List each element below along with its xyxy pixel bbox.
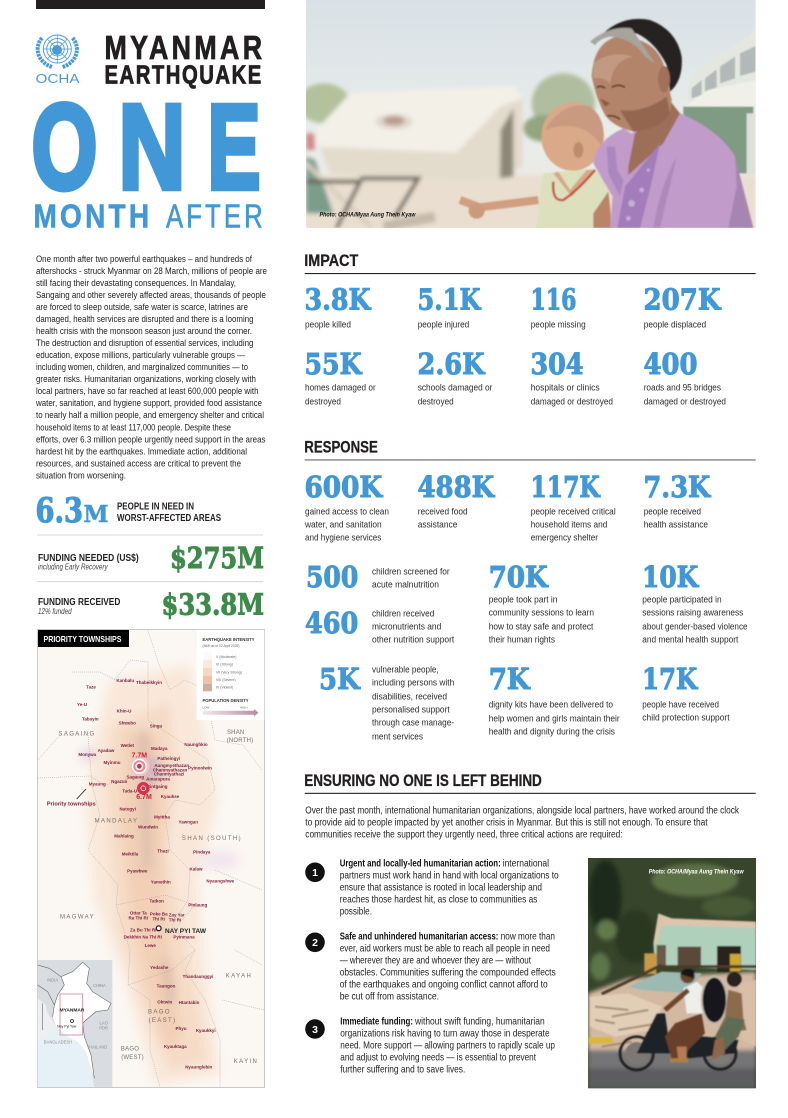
title: Myanmar Earthquake <box>104 30 262 89</box>
stat: food assistance <box>418 470 495 531</box>
map: priority townships <box>38 630 264 1088</box>
action 2: now more than <box>501 932 555 943</box>
map inset: Myanmar locator <box>38 960 112 1088</box>
map region labels: (EAST) <box>148 1018 177 1024</box>
map township labels: Thabeikkyin <box>136 680 162 685</box>
intro text block: situation from worsening. <box>36 470 126 481</box>
map township labels: Aungmyethazan <box>154 763 189 768</box>
icon: number 3 <box>305 1019 325 1039</box>
stat: child protection: people have received <box>642 700 719 711</box>
response stats <box>304 470 748 743</box>
map township labels: Patheingyi <box>157 756 180 761</box>
action 3 <box>305 1017 555 1076</box>
action 1: partners must work hand in hand with local organizations to <box>340 871 559 882</box>
map township labels: Thi Ri <box>169 918 181 923</box>
map legend <box>197 630 264 720</box>
map region labels: BAGO <box>121 1046 139 1052</box>
action 2: Safe and unhindered humanitarian access: <box>340 932 498 943</box>
map township labels: Ottar Ta <box>130 911 147 916</box>
stat: people in need: WORST-AFFECTED AREAS <box>117 513 221 524</box>
stat: vulnerable people <box>319 662 454 743</box>
map township labels: Shwebo <box>119 721 136 726</box>
action 2: of the earthquakes and ongoing conflict cannot afford to <box>340 980 548 991</box>
stat: roads and bridges: roads and 95 bridges <box>644 383 721 394</box>
icon: number 3: 3 <box>312 1024 318 1036</box>
map township labels: Pyawbwe <box>127 868 148 873</box>
map township labels: Sintgaing <box>147 784 168 789</box>
stat: child protection: child protection support <box>642 713 730 724</box>
intro text block: hardest hit by the earthquakes. Immediate action, additional <box>36 446 247 457</box>
action 1: possible. <box>340 907 372 918</box>
intro text block: education, expose millions, particularly vulnerable groups — <box>36 350 245 361</box>
stat: gender-based violence sessions: and mental health support <box>642 635 739 646</box>
stat: children screened: children screened for <box>372 567 450 578</box>
map township labels: Kanbalu <box>116 678 134 683</box>
stat: people in need: PEOPLE IN NEED IN <box>117 502 194 513</box>
map township labels: Madaya <box>151 746 168 751</box>
map township labels: Pyinoolwin <box>188 766 212 771</box>
heading: impact: IMPACT <box>304 252 358 270</box>
map legend: VI (Strong) <box>216 663 233 667</box>
map inset: Myanmar locator: LAO <box>100 1021 109 1026</box>
title: Month After <box>34 199 263 236</box>
intro paragraph: ensuring <box>305 806 740 841</box>
stat: roads and bridges: 400 <box>644 347 698 381</box>
intro text block <box>35 254 267 481</box>
stat: clean water: 600K <box>304 470 383 504</box>
intro text block: resources, and sustained access are critical to prevent the <box>36 458 241 469</box>
map township labels: Mahlaing <box>114 834 134 839</box>
heading: ensuring no one is left behind: ENSURING NO ONE IS LEFT BEHIND <box>304 772 542 790</box>
map township labels: Pinlaung <box>188 902 207 907</box>
intro text block: efforts, over 6.3 million people urgently need support in the areas <box>36 434 266 445</box>
stat: funding received: FUNDING RECEIVED <box>38 597 120 608</box>
stat: dignity kits: 7K <box>489 662 531 696</box>
map township labels: Phyu <box>175 1026 187 1031</box>
stat: funding needed: including Early Recovery <box>38 562 109 572</box>
stat: vulnerable people: personalised support <box>372 705 450 716</box>
map heading: priority townships <box>38 630 129 647</box>
map callout: priority townships: Priority townships <box>47 802 96 808</box>
map township labels: Meiktila <box>122 851 139 856</box>
title: Myanmar Earthquake: MYANMAR <box>104 30 262 67</box>
stat: vulnerable people: ment services <box>372 732 423 743</box>
map region labels: KAYAH <box>226 974 252 980</box>
stat: people in need: 6.3 <box>36 491 83 531</box>
action 2: — wherever they are and whoever they are — without <box>340 956 531 967</box>
photo: motorbike passing collapsed building: Photo: OCHA/Myaa Aung Thein Kyaw <box>649 869 744 876</box>
map township labels: Chanmyathazan <box>153 767 188 772</box>
icon: number 2: 2 <box>312 937 318 949</box>
map township labels: Zay Yar <box>169 913 185 918</box>
intro text block: The destruction and disruption of essential services, including <box>36 338 254 349</box>
title: ONE: E <box>208 79 260 215</box>
stat: vulnerable people: vulnerable people, <box>372 665 439 676</box>
map township labels: Tada-U <box>122 788 137 793</box>
intro paragraph: ensuring: communities receive the support they urgently need, three critical actions are required: <box>305 830 623 841</box>
photo: motorbike passing collapsed building <box>588 858 756 1089</box>
stat: vulnerable people: including persons with <box>372 678 454 689</box>
intro text block: including women, children, and marginalized communities — to <box>36 362 248 373</box>
map inset: Myanmar locator: Nay Pyi Taw <box>57 1025 77 1029</box>
stat: funding needed <box>38 541 264 575</box>
stat: household items: people received critical <box>531 507 616 518</box>
top black bar <box>36 0 265 9</box>
map township labels: Yamethin <box>151 880 171 885</box>
stat: schools damaged: 2.6K <box>418 347 486 381</box>
title: ONE: O <box>32 79 97 215</box>
title: ONE: N <box>118 79 186 215</box>
stat: people in need <box>36 491 221 531</box>
title: ONE <box>32 79 261 215</box>
stat: food assistance: received food <box>418 507 468 518</box>
map township labels: Amarapura <box>146 777 170 782</box>
stat: vulnerable people: through case manage- <box>372 718 454 729</box>
stat: household items: 117K <box>530 470 601 504</box>
action 1 <box>305 859 559 918</box>
map legend: POPULATION DENSITY <box>202 698 249 703</box>
stat: schools damaged: schools damaged or <box>418 383 493 394</box>
map township labels: Nyaungshwe <box>206 878 235 883</box>
stat: people injured: people injured <box>418 320 469 331</box>
intro text block: water, sanitation, and hygiene support, provided food assistance <box>35 398 262 409</box>
map township labels: Thi Ri <box>152 916 165 921</box>
map township labels: Taze <box>86 685 96 690</box>
map region labels: SHAN <box>227 730 244 736</box>
stat: people injured: 5.1K <box>418 282 482 316</box>
map township labels: Pyinmana <box>173 934 195 939</box>
map inset: Myanmar locator: MYANMAR <box>60 1008 85 1014</box>
map inset: Myanmar locator: THAILAND <box>87 1045 107 1050</box>
stat: gender-based violence sessions: 10K <box>642 560 699 594</box>
action 3: Immediate funding: <box>340 1017 413 1028</box>
map heading: priority townships: PRIORITY TOWNSHIPS <box>44 635 122 644</box>
map region labels: (WEST) <box>121 1055 144 1061</box>
photo: grandmother and child at displacement site <box>298 0 756 228</box>
stat: homes damaged <box>304 347 376 408</box>
stat: health assistance: 7.3K <box>644 470 711 504</box>
icon: OCHA logo: OCHA <box>36 71 80 86</box>
stat: children screened: 500 <box>306 560 358 594</box>
map region labels: MAGWAY <box>60 914 95 920</box>
stat: food assistance: assistance <box>418 520 457 531</box>
map legend: HIGH <box>240 705 248 709</box>
stat: micronutrients <box>305 606 455 646</box>
stat: child protection <box>642 662 730 724</box>
stat: gender-based violence sessions: sessions raising awareness <box>642 608 743 619</box>
stat: health assistance: health assistance <box>644 520 708 531</box>
action 2: be cut off from assistance. <box>340 992 439 1003</box>
map township labels: Ra Thi Ri <box>129 916 148 921</box>
map legend: IX (Violent) <box>216 686 233 690</box>
action 2: ever, aid workers must be able to reach all people in need <box>340 944 550 955</box>
baby <box>460 103 613 228</box>
stat: community sessions: how to stay safe and protect <box>489 622 594 633</box>
map township labels: Pindaya <box>193 849 211 854</box>
map township labels: Poke Ba <box>150 911 168 916</box>
map legend: EARTHQUAKE INTENSITY <box>202 637 255 642</box>
map callout: priority townships <box>47 789 96 808</box>
stat: clean water: and hygiene services <box>305 533 381 544</box>
photo: grandmother and child at displacement site: Photo: OCHA/Myaa Aung Thein Kyaw <box>320 212 416 218</box>
stat: people injured <box>418 282 482 331</box>
map epicentre: 7.7M <box>129 752 149 776</box>
action 1: international <box>503 859 549 870</box>
stat: children screened: acute malnutrition <box>372 580 439 591</box>
icon: number 1 <box>305 862 325 882</box>
map region labels: (NORTH) <box>227 738 253 744</box>
stat: children screened <box>306 560 450 594</box>
icon: number 2 <box>305 932 325 952</box>
stat: micronutrients: micronutrients and <box>372 622 441 633</box>
stat: dignity kits <box>489 662 620 738</box>
stat: roads and bridges: damaged or destroyed <box>644 397 726 408</box>
map legend: VII (Very Strong) <box>216 671 242 675</box>
map township labels: Ye-U <box>77 702 87 707</box>
map township labels: Yedashe <box>150 965 169 970</box>
map township labels: Kyauktaga <box>164 1044 187 1049</box>
title: Myanmar Earthquake: EARTHQUAKE <box>104 60 261 89</box>
intro text block: household items to at least 117,000 people. Despite these <box>36 422 231 433</box>
stat: roads and bridges <box>644 347 726 408</box>
map epicentre: 6.7M <box>136 782 152 801</box>
stat: gender-based violence sessions: about gender-based violence <box>642 622 748 633</box>
map inset: Myanmar locator: CHINA <box>93 983 106 988</box>
stat: community sessions: their human rights <box>489 635 555 646</box>
intro text block: still facing their devastating consequences. In Mandalay, <box>36 278 236 289</box>
map township labels: Taungoo <box>157 984 176 989</box>
map epicentre: 7.7M: 7.7M <box>132 752 147 760</box>
stat: household items: emergency shelter <box>531 533 599 544</box>
stat: people missing: 116 <box>530 282 576 316</box>
intro text block: health crisis with the monsoon season just around the corner. <box>36 326 252 337</box>
map township labels: Myinmu <box>103 760 121 765</box>
stat: people killed <box>304 282 372 331</box>
map township labels: Tabayin <box>82 717 99 722</box>
map region labels: SHAN (SOUTH) <box>182 836 242 842</box>
impact stats <box>304 282 726 408</box>
map capital: Nay Pyi Taw: NAY PYI TAW <box>165 928 207 935</box>
stat: schools damaged <box>418 347 493 408</box>
stat: micronutrients: other nutrition support <box>372 635 455 646</box>
intro paragraph: ensuring: to provide aid to people impacted by yet another crisis in Myanmar. But this is still not enough. To ensure that <box>305 818 708 829</box>
intro text block: to nearly half a million people, and emergency shelter and critical <box>36 410 264 421</box>
map township labels: Thazi <box>157 848 169 853</box>
icon: OCHA logo <box>36 35 80 86</box>
intro text block: local partners, have so far reached at least 600,000 people with <box>36 386 258 397</box>
map township labels: Khin-U <box>117 709 131 714</box>
map township labels: Tatkon <box>149 899 164 904</box>
intro text block: greater risks. Humanitarian organizations, working closely with <box>36 374 256 385</box>
stat: community sessions: community sessions to learn <box>489 608 594 619</box>
heading: response: RESPONSE <box>304 438 378 456</box>
map township labels: Yawngan <box>179 819 198 824</box>
stat: homes damaged: homes damaged or <box>305 383 376 394</box>
stat: clean water: water, and sanitation <box>304 520 382 531</box>
stat: community sessions <box>489 560 594 646</box>
stat: health assistance <box>644 470 711 531</box>
stat: people killed: people killed <box>305 320 351 331</box>
stat: dignity kits: dignity kits have been delivered to <box>489 700 613 711</box>
stat: micronutrients: 460 <box>305 606 358 640</box>
stat: people killed: 3.8K <box>304 282 372 316</box>
map region labels: KAYIN <box>234 1059 258 1065</box>
title: Month After: AFTER <box>166 199 263 236</box>
stat: community sessions: people took part in <box>489 595 557 606</box>
stat: gender-based violence sessions: people participated in <box>642 595 722 606</box>
stat: people missing <box>530 282 586 331</box>
map township labels: Chanmyathazi <box>154 772 184 777</box>
map township labels: Kyaukse <box>161 794 180 799</box>
stat: people displaced <box>644 282 722 331</box>
woman <box>590 19 753 228</box>
map township labels: Natogyi <box>119 806 136 811</box>
map township labels: Dekkhin Na Thi Ri <box>124 935 162 940</box>
stat: micronutrients: children received <box>372 609 434 620</box>
action 3: organizations risk having to turn away those in desperate <box>340 1029 550 1040</box>
map township labels: Ayadaw <box>98 748 115 753</box>
stat: hospitals damaged: damaged or destroyed <box>531 397 613 408</box>
action 1: reaches those hardest hit, as close to communities as <box>340 895 537 906</box>
map legend: (MMI as of 02 April 2025) <box>202 644 240 648</box>
stat: funding received <box>38 588 264 622</box>
intro text block: aftershocks - struck Myanmar on 28 March, millions of people are <box>36 266 267 277</box>
map region labels <box>58 730 258 1065</box>
stat: food assistance: 488K <box>418 470 495 504</box>
intro text block: damaged, health services are disrupted and there is a looming <box>36 314 254 325</box>
action 2 <box>305 932 556 1003</box>
stat: funding received: $33.8M <box>162 588 264 622</box>
action 1: ensure that assistance is rooted in local leadership and <box>340 883 542 894</box>
map township labels: Wetlet <box>121 743 135 748</box>
map legend: VIII (Severe) <box>216 678 236 682</box>
stat: people displaced: 207K <box>644 282 722 316</box>
intro text block: are forced to sleep outside, safe water is scarce, latrines are <box>36 302 248 313</box>
map region labels: SAGAING <box>58 732 96 738</box>
stat: hospitals damaged: 304 <box>530 347 584 381</box>
stat: funding needed: FUNDING NEEDED (US$) <box>38 553 139 564</box>
map township labels: Myaung <box>89 782 106 787</box>
stat: funding needed: $275M <box>170 541 264 575</box>
stat: homes damaged: destroyed <box>305 397 341 408</box>
map township labels: Myittha <box>154 814 170 819</box>
action 2: obstacles. Communities suffering the compounded effects <box>340 968 556 979</box>
stat: household items: household items and <box>531 520 607 531</box>
map region labels: MANDALAY <box>95 818 138 824</box>
icon: number 1: 1 <box>312 867 318 879</box>
stat: gender-based violence sessions <box>642 560 748 646</box>
map township labels: Sagaing <box>127 775 144 780</box>
map township labels: Ngazun <box>111 779 128 784</box>
map township labels: Thandaunggyi <box>183 974 213 979</box>
stat: schools damaged: destroyed <box>418 397 454 408</box>
map township labels: Kalaw <box>189 866 203 871</box>
map township labels: Nyaunglebin <box>185 1065 212 1070</box>
map legend: LOW <box>202 705 210 709</box>
title: Month After: MONTH <box>34 199 149 235</box>
intro text block: Sangaing and other severely affected areas, thousands of people <box>36 290 266 301</box>
map township labels: Lewe <box>145 943 156 948</box>
map township labels <box>77 678 235 1070</box>
map capital: Nay Pyi Taw <box>156 926 207 935</box>
stat: funding received: 12% funded <box>38 607 72 616</box>
stat: community sessions: 70K <box>489 560 549 594</box>
stat: clean water: gained access to clean <box>305 507 389 518</box>
stat: people in need: M <box>84 501 108 528</box>
action 3: need. More support — allowing partners to rapidly scale up <box>340 1041 555 1052</box>
stat: household items <box>530 470 616 544</box>
map township labels: Singu <box>150 724 162 729</box>
action 3: further suffering and to save lives. <box>340 1065 465 1076</box>
map inset: Myanmar locator: INDIA <box>47 977 58 982</box>
map inset: Myanmar locator: BANGLADESH <box>44 1040 72 1045</box>
action 1: Urgent and locally-led humanitarian action: <box>340 859 501 870</box>
stat: vulnerable people: 5K <box>319 662 361 696</box>
map region labels: BAGO <box>148 1010 171 1016</box>
map township labels: Wundwin <box>138 825 158 830</box>
stat: health assistance: people received <box>644 507 701 518</box>
intro text block: One month after two powerful earthquakes – and hundreds of <box>36 254 252 265</box>
stat: people displaced: people displaced <box>644 320 706 331</box>
map township labels: Oktwin <box>157 1000 172 1005</box>
stat: child protection: 17K <box>642 662 698 696</box>
map township labels: Naunghkio <box>184 742 208 747</box>
map inset: Myanmar locator: PDR <box>99 1026 108 1031</box>
stat: vulnerable people: disabilities, received <box>372 692 447 703</box>
map legend: V (Moderate) <box>216 655 236 659</box>
map township labels: Monywa <box>78 752 97 757</box>
map township labels: Za Bu Thi Ri <box>130 927 156 932</box>
stat: dignity kits: help women and girls maintain their <box>489 714 620 725</box>
stat: hospitals damaged <box>530 347 613 408</box>
stat: clean water <box>304 470 389 544</box>
stat: dignity kits: health and dignity during the crisis <box>489 727 615 738</box>
stat: homes damaged: 55K <box>304 347 363 381</box>
stat: hospitals damaged: hospitals or clinics <box>531 383 600 394</box>
map township labels: Kyaukkyi <box>196 1028 216 1033</box>
map epicentre: 6.7M: 6.7M <box>136 794 152 801</box>
map township labels: Htantabin <box>179 1000 200 1005</box>
action 3: and adjust to evolving needs — is essential to prevent <box>340 1053 536 1064</box>
action 3: without swift funding, humanitarian <box>414 1017 545 1028</box>
stat: people missing: people missing <box>531 320 586 331</box>
